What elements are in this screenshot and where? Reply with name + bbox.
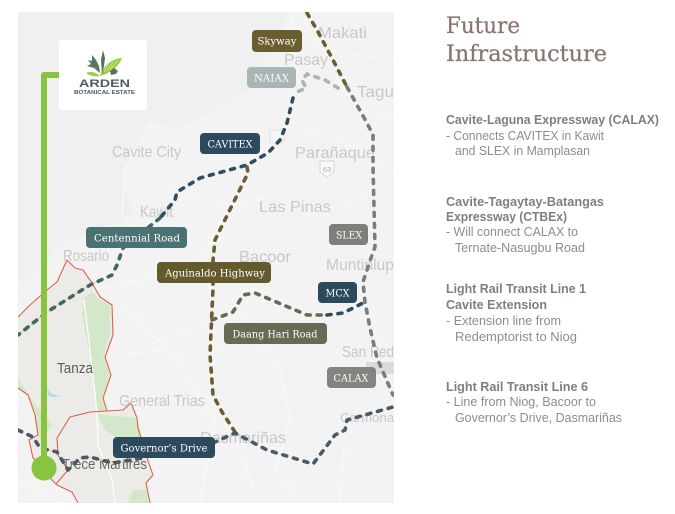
label: SLEX: SLEX bbox=[336, 230, 362, 242]
text block: LRT Line 6: Light Rail Transit Line 6 bbox=[446, 380, 588, 394]
map place names: Muntinlup bbox=[326, 257, 394, 274]
route: Daang Hari Road bbox=[212, 293, 327, 320]
title: Future bbox=[446, 14, 520, 39]
label: MCX bbox=[318, 282, 357, 303]
text block: CTBEx: Expressway (CTBEx) bbox=[446, 210, 567, 224]
label: Skyway: Skyway bbox=[258, 36, 297, 48]
label: Daang Hari Road bbox=[224, 323, 327, 344]
label: Centennial Road: Centennial Road bbox=[94, 232, 180, 244]
green location line bbox=[32, 75, 59, 480]
label: CALAX bbox=[327, 367, 376, 388]
map place names: Tanza bbox=[57, 361, 94, 377]
shields: 63 bbox=[323, 165, 331, 174]
label: Daang Hari Road: Daang Hari Road bbox=[232, 328, 318, 340]
route: Aguinaldo Highway bbox=[210, 167, 248, 432]
label: CALAX: CALAX bbox=[334, 372, 369, 384]
route: Skyway bbox=[307, 13, 347, 87]
text block: LRT Line 1: Light Rail Transit Line 1 bbox=[446, 282, 586, 296]
map place names: Parañaque bbox=[295, 145, 375, 162]
label: Governor's Drive bbox=[113, 437, 215, 458]
label: CAVITEX bbox=[200, 133, 260, 154]
text block: CTBEx bbox=[446, 195, 604, 255]
logo leaves bbox=[86, 50, 122, 76]
region: Cavite outline bbox=[18, 260, 153, 503]
label: NAIAX: NAIAX bbox=[254, 72, 290, 84]
map place names bbox=[57, 25, 395, 473]
panel: map bbox=[18, 12, 395, 503]
text block: LRT Line 1 bbox=[446, 282, 586, 344]
map place names: Cavite City bbox=[112, 144, 181, 161]
label: Centennial Road bbox=[86, 227, 187, 248]
text block: CALAX: Cavite-Laguna Expressway (CALAX) bbox=[446, 113, 659, 127]
route: NAIAX bbox=[295, 74, 338, 93]
text block: CTBEx: - Will connect CALAX to bbox=[446, 224, 578, 239]
text block: LRT Line 1: Redemptorist to Niog bbox=[455, 329, 577, 344]
route: SLEX bbox=[347, 87, 393, 395]
map place names: Bacoor bbox=[239, 249, 292, 266]
location pin bbox=[32, 456, 56, 480]
label: MCX: MCX bbox=[326, 288, 350, 300]
map place names: Carmona bbox=[340, 410, 395, 425]
logo bbox=[59, 40, 147, 110]
map place names: Las Pinas bbox=[259, 199, 331, 216]
text block: CALAX: - Connects CAVITEX in Kawit bbox=[446, 128, 604, 143]
label: Governor's Drive: Governor’s Drive bbox=[120, 442, 208, 454]
text block: LRT Line 1: Cavite Extension bbox=[446, 298, 547, 312]
route: Governor's Drive bbox=[18, 407, 393, 470]
map place names: General Trias bbox=[119, 393, 205, 410]
text block: LRT Line 6: Governor’s Drive, Dasmariñas bbox=[455, 410, 622, 425]
label: CAVITEX: CAVITEX bbox=[208, 138, 253, 150]
text block: CTBEx: Ternate-Nasugbu Road bbox=[455, 240, 585, 255]
map place names: Rosario bbox=[63, 248, 109, 265]
text block: LRT Line 1: - Extension line from bbox=[446, 313, 561, 328]
map place names: Tagu bbox=[357, 84, 394, 101]
route: MCX bbox=[327, 302, 365, 315]
route: Centennial Road bbox=[18, 218, 160, 335]
shields bbox=[270, 130, 394, 374]
logo: ARDEN bbox=[79, 78, 130, 90]
map place names: Kawit bbox=[140, 204, 173, 221]
label: SLEX bbox=[329, 224, 368, 245]
route: CAVITEX bbox=[160, 98, 293, 218]
map place names: Dasmariñas bbox=[200, 430, 286, 447]
local roads bbox=[122, 122, 150, 218]
label: Skyway bbox=[252, 30, 302, 52]
map place names: Makati bbox=[318, 25, 367, 42]
text block: CALAX: and SLEX in Mamplasan bbox=[455, 143, 590, 158]
land base bbox=[18, 12, 394, 503]
text block: LRT Line 6: - Line from Niog, Bacoor to bbox=[446, 394, 596, 409]
map place names: Trece Martires bbox=[62, 457, 147, 473]
text block: CTBEx: Cavite-Tagaytay-Batangas bbox=[446, 195, 604, 209]
logo: BOTANICAL ESTATE bbox=[74, 90, 136, 96]
map place names: Pasay bbox=[284, 52, 328, 69]
label: Aguinaldo Highway bbox=[157, 262, 271, 283]
text block: LRT Line 6 bbox=[446, 380, 622, 425]
label: NAIAX bbox=[247, 67, 296, 88]
water bbox=[47, 389, 60, 397]
title bbox=[446, 14, 607, 67]
map place names: San Ped bbox=[342, 344, 394, 361]
title: Infrastructure bbox=[446, 42, 607, 67]
text block: CALAX bbox=[446, 113, 659, 158]
label: Aguinaldo Highway: Aguinaldo Highway bbox=[164, 268, 265, 280]
green areas bbox=[18, 292, 148, 503]
